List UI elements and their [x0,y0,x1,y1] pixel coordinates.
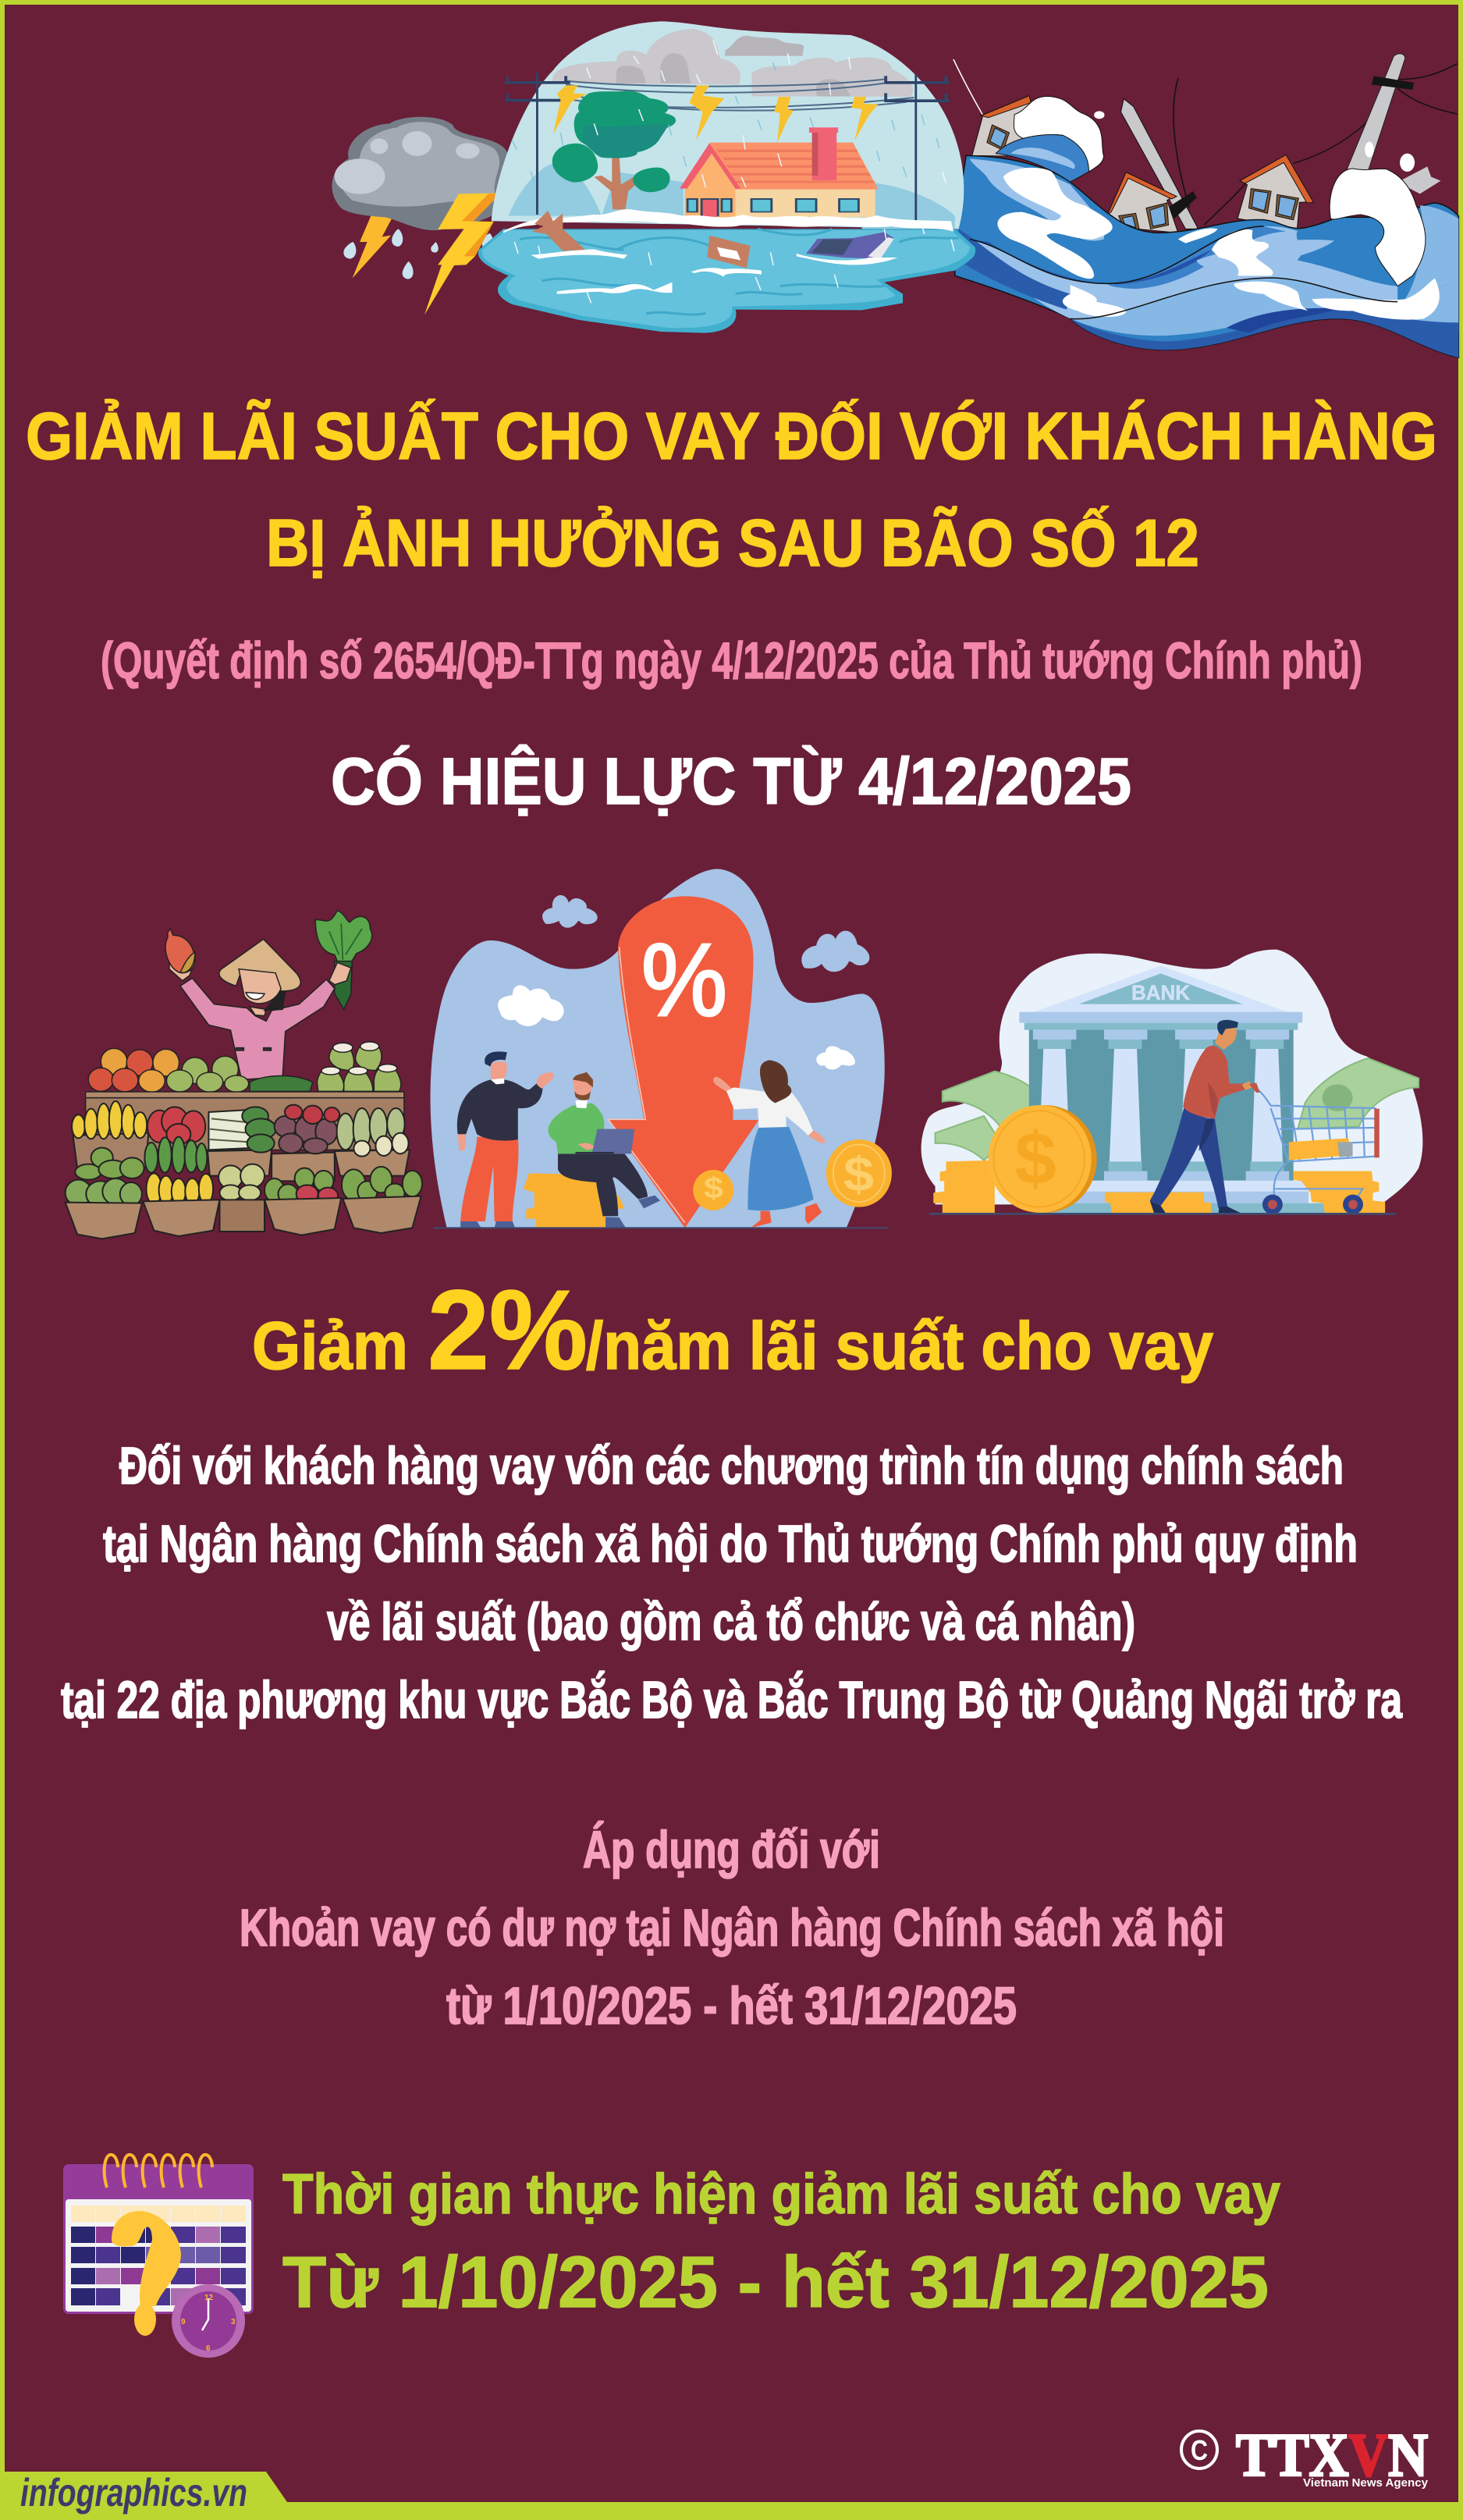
illustration: percent arrow with people [431,869,892,1228]
clock: 12 [204,2294,214,2302]
houses in wave [972,96,1313,233]
woman [713,1060,825,1228]
icon: calendar with question mark and clock [63,2155,254,2358]
text block: implementation period: Từ 1/10/2025 - hết 31/12/2025 [282,2241,1269,2323]
pale greens [337,1108,405,1150]
clouds [498,895,869,1070]
text block: implementation period [282,2163,1280,2323]
footer: infographics.vn tab: infographics.vn [20,2471,247,2515]
vendor woman [165,929,351,1079]
floodwater [478,229,975,333]
title [26,399,1437,581]
poles [1120,99,1198,229]
fruit on stall [88,1042,401,1092]
gold coin piles [933,1160,995,1213]
text: dollar signs on coins: $ [843,1148,874,1202]
white foam patches [997,96,1440,320]
basket bodies [66,1203,142,1239]
icon: tsunami wave with houses [953,54,1458,357]
tree [594,156,652,209]
text block: eligible customers: về lãi suất (bao gồm cả tổ chức và cá nhân) [327,1593,1135,1651]
heading: 2% per year reduction [252,1267,1213,1393]
text block: applicable loans: Áp dụng đối với [583,1821,880,1879]
bananas upper [72,1101,147,1139]
text: dollar signs on coins [704,1148,874,1205]
heading: effective date: CÓ HIỆU LỰC TỪ 4/12/2025 [331,745,1131,818]
bills left [943,1072,1049,1137]
big dollar coin [993,1105,1097,1213]
red arrow [609,896,758,1228]
building [1019,965,1325,1213]
clouds in dome [552,29,913,97]
rain [514,41,954,303]
heading: 2% per year reduction: /năm lãi suất cho vay [586,1309,1213,1384]
clock: 9 [181,2318,186,2326]
icon: flooded house in glass dome [478,21,975,333]
logo: TTXVN: Vietnam News Agency [1303,2476,1429,2490]
red fruit [147,1107,205,1145]
middle row [144,1137,207,1173]
clock: 3 [231,2318,236,2326]
coin stack [524,1173,625,1228]
heading: 2% per year reduction: Giảm [252,1309,408,1384]
text: BANK on pediment: BANK [1131,981,1190,1004]
text: percent sign on arrow: % [641,922,727,1037]
heading: 2% per year reduction: 2% [428,1267,588,1393]
man pushing cart [1150,1020,1252,1214]
illustration: flood and storm scene [332,21,1458,357]
logo: TTXVN: TTXVN [1236,2421,1428,2489]
lightning bolts in dome [553,85,879,143]
onions and red [275,1116,337,1153]
backdrop blob [921,950,1422,1204]
title: BỊ ẢNH HƯỞNG SAU BÃO SỐ 12 [266,506,1199,581]
bills right [1298,1058,1419,1129]
clock: 6 [206,2344,211,2353]
house [685,189,736,217]
icon: storm cloud with lightning [332,117,510,315]
text block: implementation period: Thời gian thực hiện giảm lãi suất cho vay [282,2163,1280,2226]
shopping cart [1251,1085,1376,1204]
text block: applicable loans [240,1821,1224,2035]
white radish with greens [208,1110,275,1150]
man standing [457,1051,554,1228]
clock [172,2284,245,2358]
blue backdrop [431,869,885,1228]
logo: TTXVN: C [1191,2434,1208,2466]
man seated with laptop [549,1072,660,1228]
baskets with produce [66,1101,422,1239]
stall table [86,1092,404,1150]
dollar coins [693,1139,892,1210]
text block: eligible customers [61,1437,1403,1729]
text: dollar sign on bank coin: $ [1014,1118,1056,1200]
wires and poles [564,80,914,111]
illustration: market vendor stall [66,911,422,1239]
bottom row produce [66,1178,142,1207]
text block: applicable loans: từ 1/10/2025 - hết 31/12/2025 [446,1977,1017,2035]
text: dollar signs on coins: $ [704,1172,723,1205]
question mark [112,2211,181,2336]
calendar rings [105,2155,212,2188]
illustration: bank with shopper [921,950,1422,1215]
wave body [955,155,1458,357]
greens bunch [315,911,372,1009]
